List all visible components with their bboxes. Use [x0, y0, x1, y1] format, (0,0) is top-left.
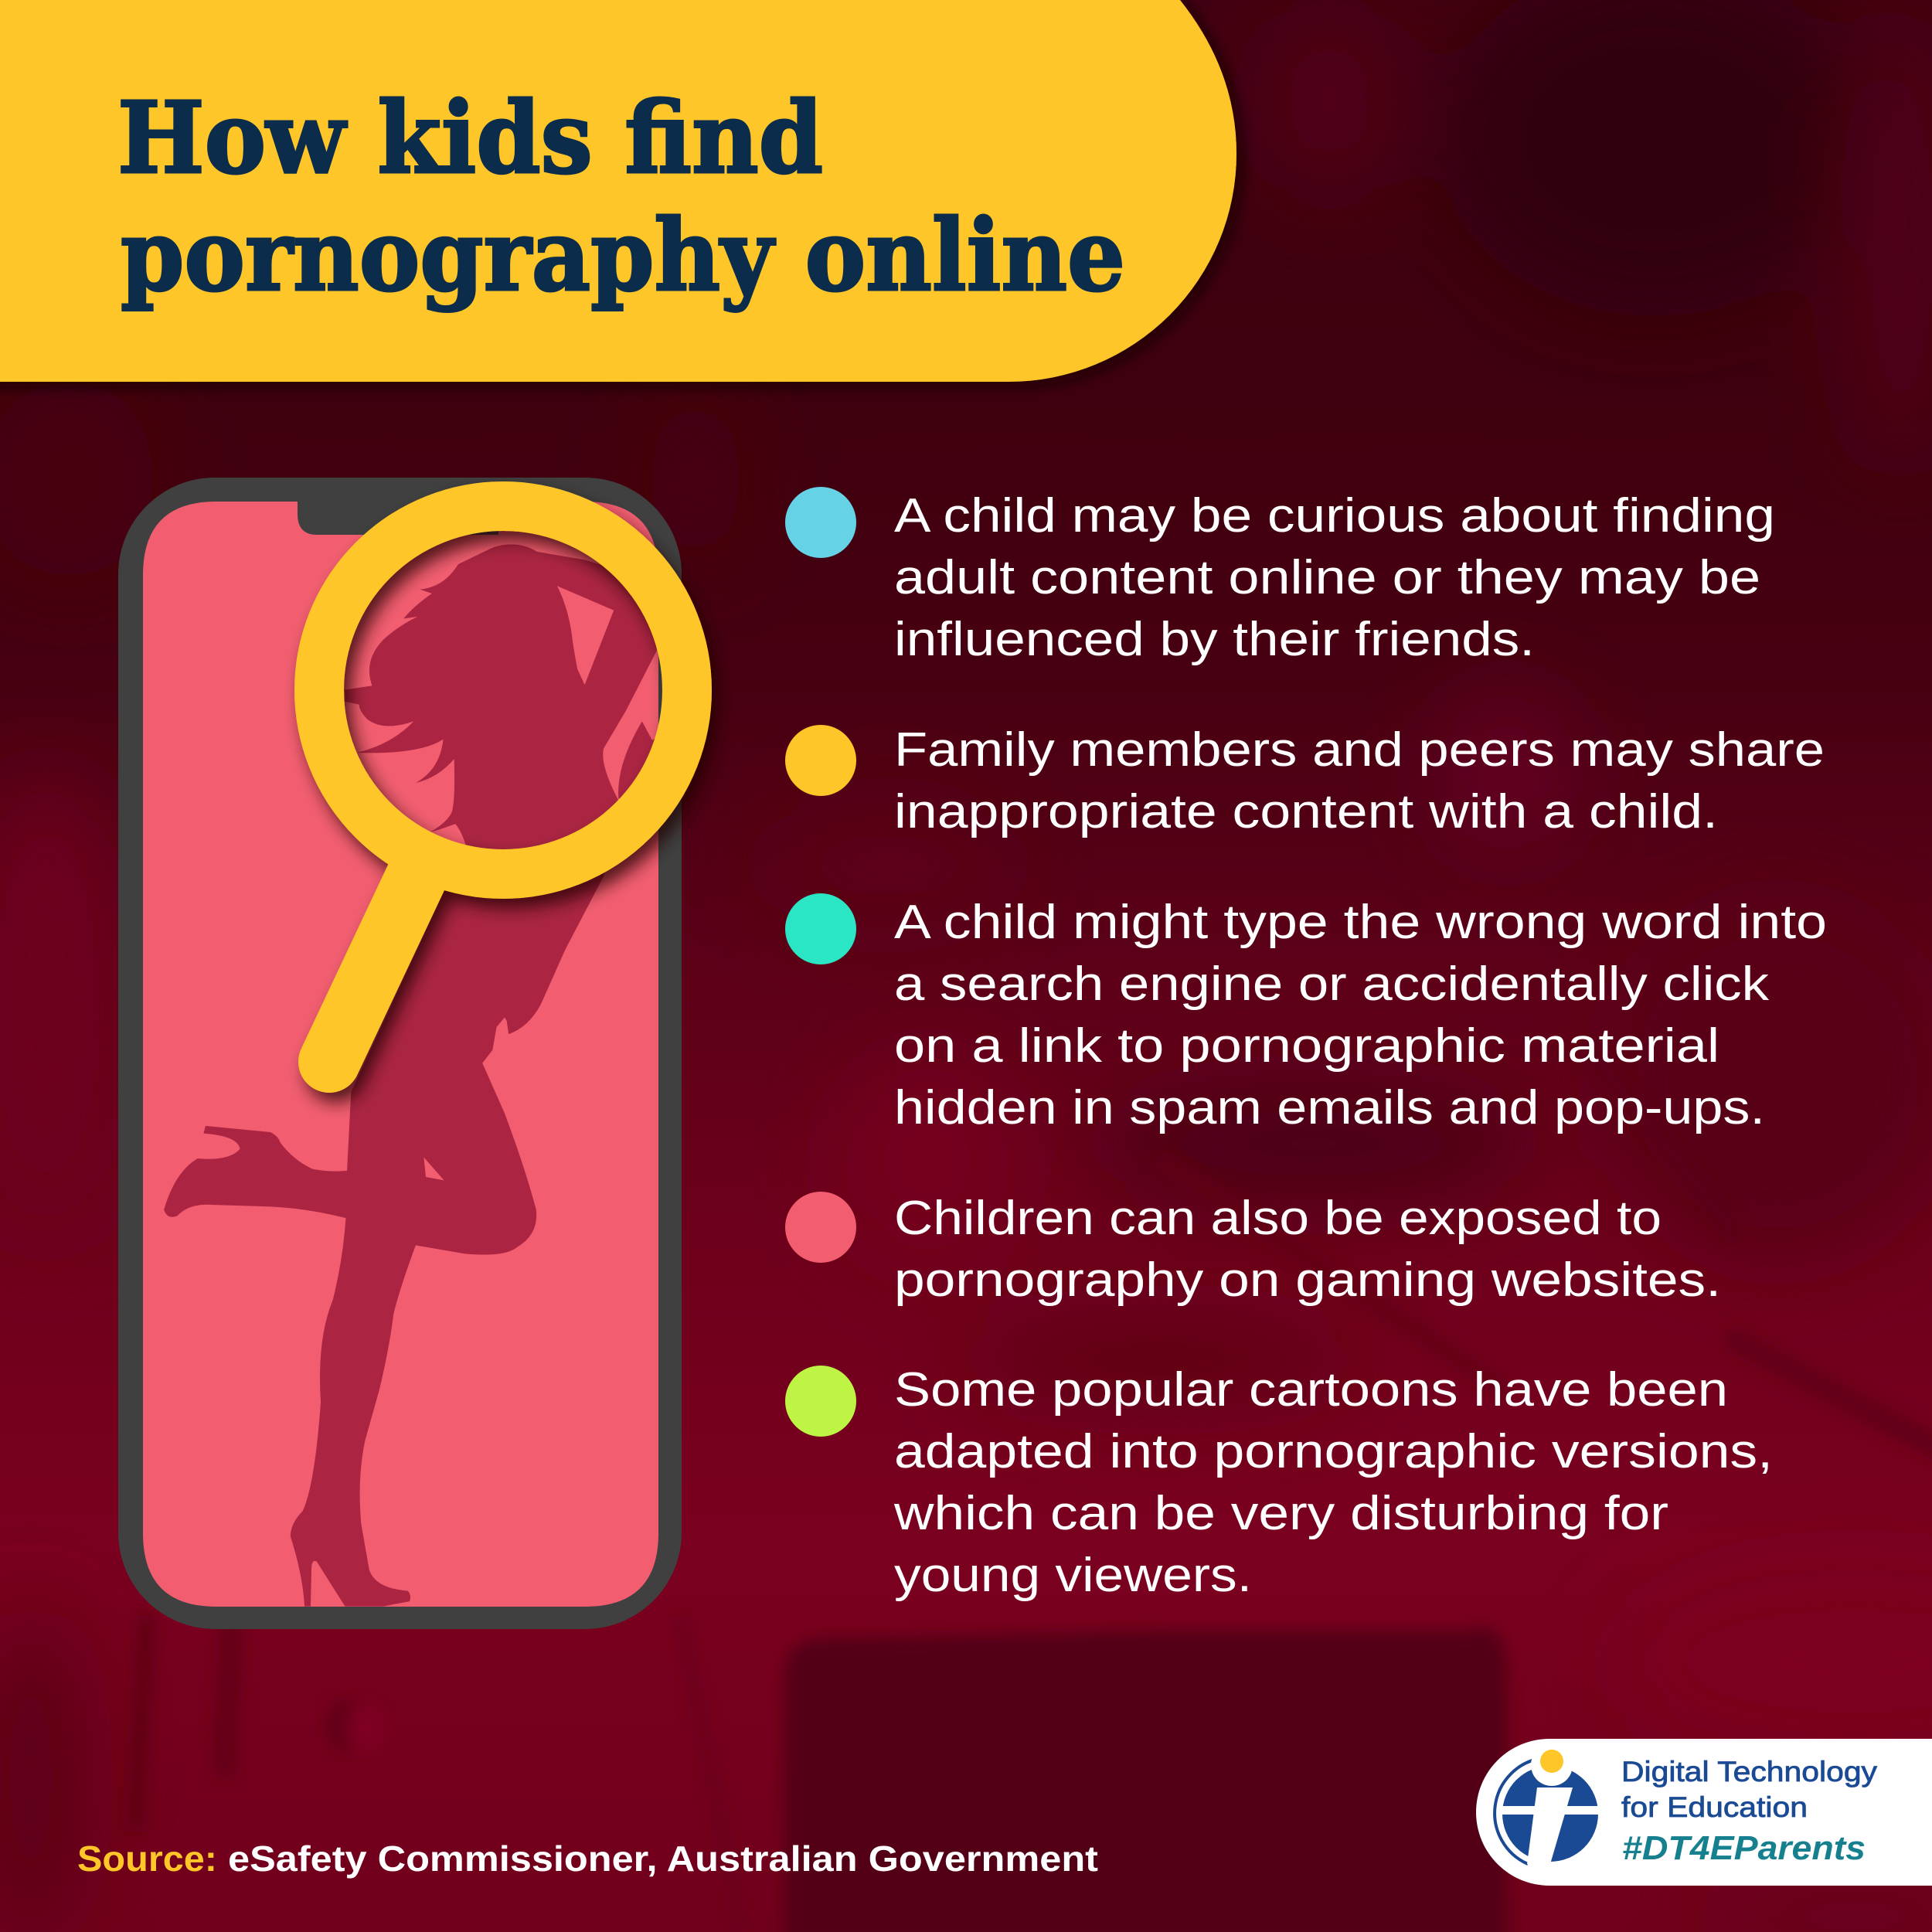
phone illustration	[118, 478, 682, 1629]
item 4 text: pornography on gaming websites.	[894, 1253, 1721, 1307]
item 1 text: influenced by their friends.	[894, 613, 1535, 666]
laptop shape in photo	[784, 1628, 1507, 1932]
item 5 text: young viewers.	[894, 1549, 1252, 1602]
bullet: coral	[785, 1192, 856, 1263]
magnifying glass	[319, 506, 687, 1062]
item 3 text: hidden in spam emails and pop-ups.	[894, 1081, 1765, 1134]
item 3	[785, 893, 1827, 1134]
item 4	[785, 1192, 1721, 1307]
bullet: teal	[785, 893, 856, 964]
phone screen	[143, 502, 675, 1607]
logo text: #DT4EParents	[1622, 1829, 1866, 1867]
logo mark	[1495, 1744, 1601, 1864]
bullet: blue	[785, 487, 856, 558]
fabric folds in photo	[135, 1043, 1932, 1932]
item 5 text: which can be very disturbing for	[893, 1487, 1668, 1540]
item 3 text	[894, 896, 1827, 1134]
item 2 text: inappropriate content with a child.	[894, 785, 1718, 838]
title text: How kids find	[117, 80, 823, 196]
item 3 text: a search engine or accidentally click	[894, 957, 1770, 1011]
source line: eSafety Commissioner, Australian Government	[228, 1838, 1098, 1879]
item 3 text: A child might type the wrong word into	[894, 896, 1827, 949]
item 1 text: adult content online or they may be	[894, 551, 1760, 604]
title text	[117, 80, 1125, 313]
item 4 text: Children can also be exposed to	[894, 1192, 1662, 1245]
item 2 text: Family members and peers may share	[894, 723, 1825, 777]
item 1	[785, 487, 1775, 666]
item 2	[785, 723, 1825, 838]
phone notch	[298, 495, 498, 535]
title banner	[0, 0, 1236, 382]
bullet: yellow	[785, 725, 856, 796]
coat button in photo	[326, 1699, 384, 1753]
bullet: lime	[785, 1366, 856, 1437]
logo text	[1621, 1756, 1878, 1867]
item 4 text	[894, 1192, 1721, 1307]
logo badge	[1476, 1739, 1932, 1886]
phone body	[118, 478, 682, 1629]
white pill	[1476, 1739, 1932, 1886]
item 5	[785, 1363, 1773, 1602]
item 3 text: on a link to pornographic material	[894, 1019, 1719, 1073]
item 2 text	[894, 723, 1825, 838]
title text: pornography online	[121, 198, 1125, 313]
item 1 text	[894, 489, 1775, 666]
lens ring	[319, 506, 687, 874]
logo text: for Education	[1621, 1791, 1808, 1823]
item 5 text	[893, 1363, 1773, 1602]
handle	[329, 870, 420, 1062]
list of ways	[785, 487, 1827, 1602]
item 5 text: Some popular cartoons have been	[894, 1363, 1728, 1417]
item 5 text: adapted into pornographic versions,	[894, 1425, 1773, 1478]
silhouette figure	[164, 544, 675, 1607]
source line: Source:	[77, 1838, 217, 1879]
logo text: Digital Technology	[1621, 1756, 1878, 1787]
item 1 text: A child may be curious about finding	[894, 489, 1775, 543]
